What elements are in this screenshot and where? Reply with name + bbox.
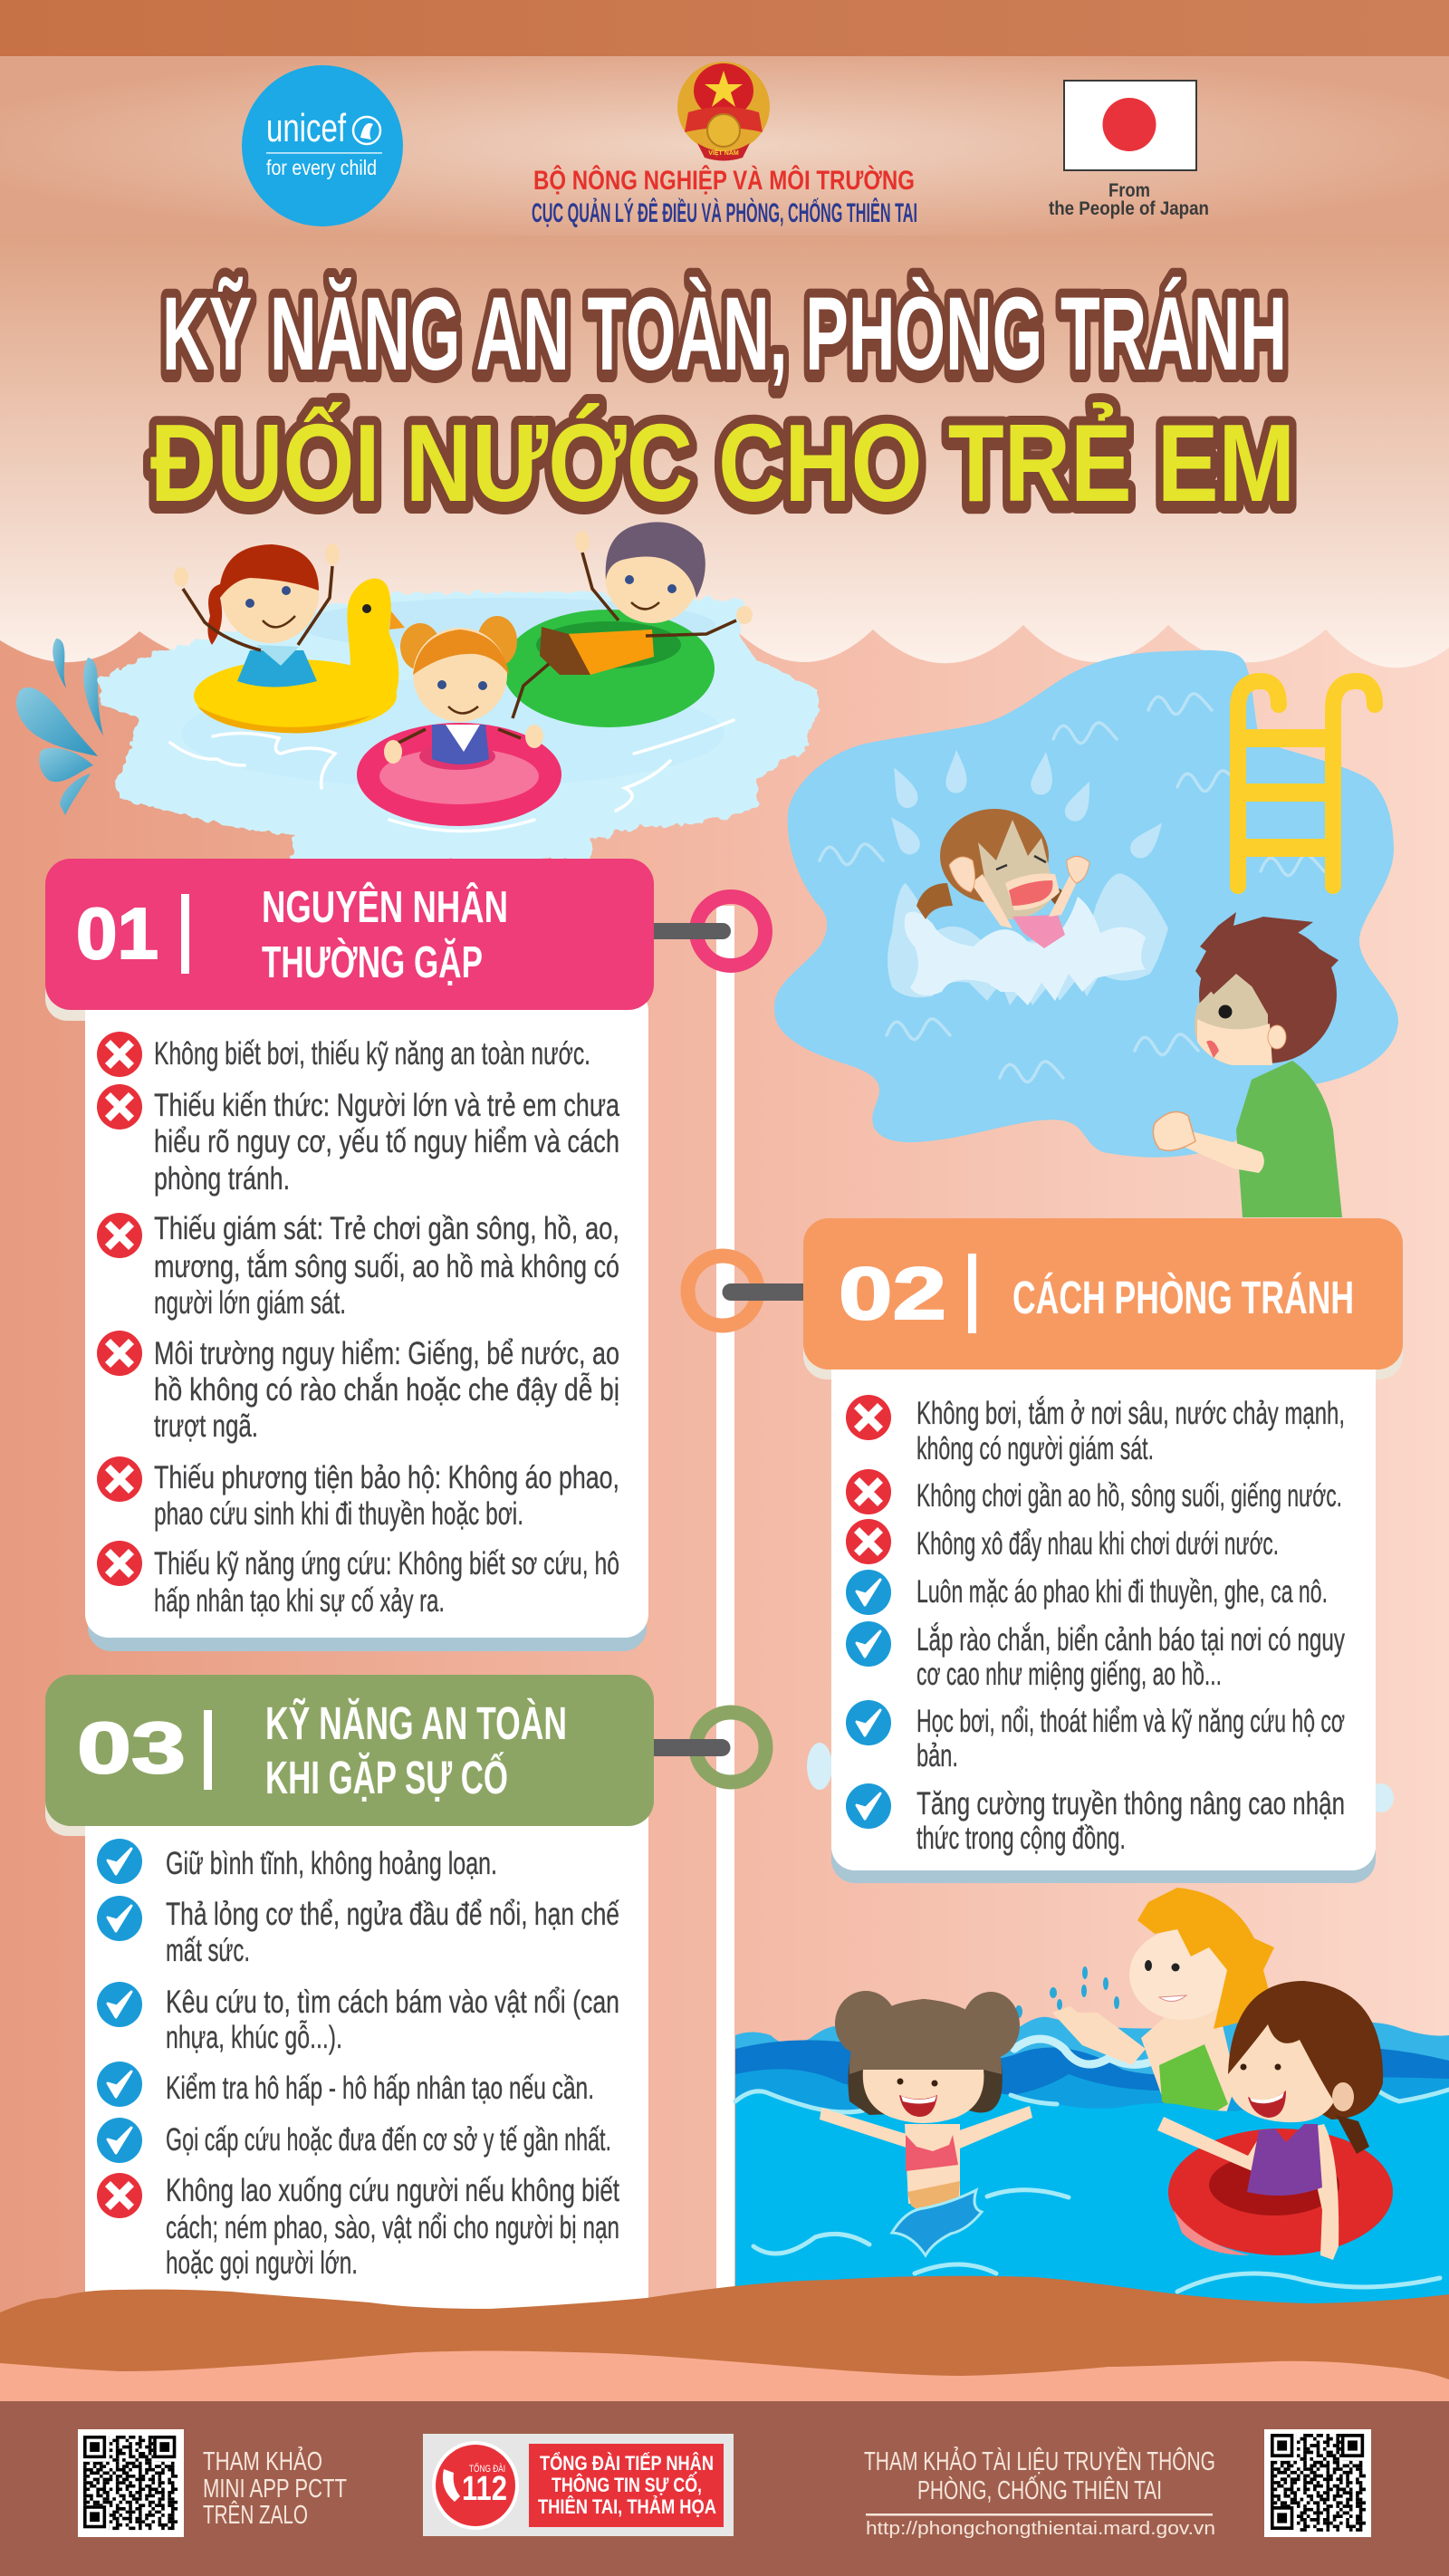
- list: causes: hiểu rõ nguy cơ, yếu tố nguy hiểm và cách: [154, 1124, 619, 1159]
- footer text: mini app: TRÊN ZALO: [203, 2500, 308, 2530]
- logo: Vietnam national emblem: [677, 62, 770, 161]
- QR code: mini app: [78, 2429, 184, 2537]
- footer text: mini app: MINI APP PCTT: [203, 2475, 347, 2504]
- footer text: documents: [864, 2446, 1215, 2539]
- illustration: pool with children on floats: [98, 522, 818, 860]
- list: causes: hấp nhân tạo khi sự cố xảy ra.: [154, 1583, 445, 1619]
- panel: 01 causes: [45, 859, 765, 1651]
- float: green ring: [503, 610, 715, 727]
- logo: Vietnam national emblem: VIỆT NAM: [708, 149, 739, 157]
- float: pink ring: [357, 723, 561, 826]
- list: causes: phòng tránh.: [154, 1161, 290, 1197]
- top colour band: [0, 0, 1449, 56]
- footer text: documents: PHÒNG, CHỐNG THIÊN TAI: [917, 2475, 1162, 2505]
- water squiggles: [820, 694, 1324, 1082]
- illustration: left water splash: [16, 639, 103, 815]
- water blob: [774, 650, 1398, 1158]
- list: safety skills: mất sức.: [166, 1933, 250, 1968]
- pool ladder: [1238, 681, 1375, 886]
- header: 02: 02: [839, 1253, 946, 1335]
- child: girl with red hair: [174, 543, 340, 687]
- footer: [0, 2401, 1449, 2576]
- list: prevention: cơ cao như miệng giếng, ao hồ...: [916, 1657, 1222, 1692]
- footer text: documents: THAM KHẢO TÀI LIỆU TRUYỀN THÔNG: [864, 2446, 1215, 2476]
- header: 02: [803, 1218, 1403, 1370]
- list: causes: Thiếu giám sát: Trẻ chơi gần sông, hồ, ao,: [154, 1211, 619, 1246]
- ministry name: CỤC QUẢN LÝ ĐÊ ĐIỀU VÀ PHÒNG, CHỐNG THIÊN TAI: [532, 197, 917, 228]
- list: safety skills: [97, 1839, 619, 2281]
- list: prevention: thức trong cộng đồng.: [916, 1821, 1126, 1856]
- splash: [888, 873, 1168, 1005]
- water splash at waist: [892, 2190, 982, 2255]
- list: causes: Môi trường nguy hiểm: Giếng, bể nước, ao: [154, 1336, 619, 1371]
- ministry name: BỘ NÔNG NGHIỆP VÀ MÔI TRƯỜNG: [533, 165, 915, 196]
- QR code: documents: [1264, 2429, 1371, 2537]
- girl on red ring: [1157, 1981, 1393, 2260]
- list: prevention: bản.: [916, 1738, 958, 1773]
- ministry name: [532, 165, 917, 228]
- connector ring 02: [688, 1255, 803, 1326]
- list: causes: Thiếu phương tiện bảo hộ: Không áo phao,: [154, 1460, 619, 1495]
- list: safety skills: Giữ bình tĩnh, không hoảng loạn.: [166, 1846, 497, 1881]
- list: safety skills: cách; ném phao, sào, vật nổi cho người bị nạn: [166, 2210, 619, 2245]
- panel: 02 prevention: [688, 1218, 1403, 1883]
- logo: Japan flag: the People of Japan: [1049, 198, 1209, 219]
- header: 01: NGUYÊN NHÂN: [262, 882, 508, 932]
- list: causes: người lớn giám sát.: [154, 1285, 346, 1321]
- list: safety skills: Gọi cấp cứu hoặc đưa đến cơ sở y tế gần nhất.: [166, 2122, 611, 2158]
- child: girl with orange hair: [384, 616, 543, 764]
- list: safety skills: nhựa, khúc gỗ...).: [166, 2020, 342, 2055]
- list: safety skills: Không lao xuống cứu người nếu không biết: [166, 2173, 619, 2208]
- connector ring 01: [654, 897, 765, 966]
- list: causes: Không biết bơi, thiếu kỹ năng an toàn nước.: [154, 1036, 590, 1072]
- list: safety skills: hoặc gọi người lớn.: [166, 2245, 358, 2281]
- logo: Japan flag: [1049, 81, 1209, 219]
- timeline vertical line: [716, 906, 734, 2391]
- front water: [735, 2086, 1449, 2391]
- hotline 112 badge: TỔNG ĐÀI: [469, 2463, 505, 2475]
- float: yellow duck: [194, 579, 405, 734]
- header: 03: [45, 1675, 654, 1826]
- header: 03: 03: [77, 1707, 186, 1788]
- worried boy: [1153, 912, 1342, 1217]
- illustration: child drowning and boy calling for help: [774, 650, 1398, 1217]
- footer text: mini app: [203, 2446, 347, 2530]
- bottom wave: brown: [0, 2276, 1449, 2379]
- girl with hair buns: [820, 1991, 1032, 2255]
- list: causes: Thiếu kỹ năng ứng cứu: Không biết sơ cứu, hô: [154, 1546, 619, 1581]
- header: 01: 01: [76, 893, 158, 974]
- hotline 112 badge: TỔNG ĐÀI TIẾP NHẬN: [540, 2452, 714, 2475]
- header: 01: THƯỜNG GẶP: [262, 937, 483, 987]
- list: safety skills: Kiểm tra hô hấp - hô hấp nhân tạo nếu cần.: [166, 2071, 594, 2106]
- pool water: [98, 591, 818, 860]
- panel: 03 safety skills: [45, 1675, 766, 2382]
- illustration: children playing in the waves: [735, 1888, 1449, 2391]
- boy with orange hair: [1015, 1888, 1274, 2124]
- list: prevention: không có người giám sát.: [916, 1431, 1154, 1466]
- logo: unicef: unicef: [266, 106, 347, 150]
- cloud puffs behind panel 2: [807, 1743, 1394, 1812]
- logo: unicef: for every child: [266, 156, 377, 179]
- hotline 112 badge: THÔNG TIN SỰ CỐ,: [552, 2473, 702, 2496]
- header: 01: [45, 859, 654, 1010]
- hotline 112 badge: 112: [462, 2470, 507, 2508]
- hotline 112 badge: THIÊN TAI, THẢM HỌA: [538, 2495, 716, 2518]
- sky area with scalloped wave edge: [0, 235, 1449, 668]
- footer text: mini app: THAM KHẢO: [203, 2446, 322, 2476]
- title: [150, 276, 1295, 524]
- child: boy with dark hair: [513, 522, 753, 718]
- logo: unicef: [242, 65, 403, 226]
- list: safety skills: Thả lỏng cơ thể, ngửa đầu để nổi, hạn chế: [166, 1897, 619, 1932]
- bottom wave: salmon strip: [0, 2319, 1449, 2405]
- list: causes: mương, tắm sông suối, ao hồ mà không có: [154, 1249, 619, 1284]
- water droplets: [882, 750, 1170, 862]
- water ripples: [170, 720, 734, 831]
- header: 03: KHI GẶP SỰ CỐ: [265, 1751, 508, 1803]
- list: causes: trượt ngã.: [154, 1408, 258, 1444]
- back waves: [735, 2017, 1449, 2355]
- hotline 112 badge: [423, 2434, 734, 2536]
- list: causes: Thiếu kiến thức: Người lớn và trẻ em chưa: [154, 1088, 619, 1123]
- header: 03: KỸ NĂNG AN TOÀN: [265, 1697, 567, 1749]
- list: causes: phao cứu sinh khi đi thuyền hoặc bơi.: [154, 1496, 523, 1532]
- connector ring 03: [654, 1712, 766, 1783]
- list: causes: hồ không có rào chắn hoặc che đậy dễ bị: [154, 1372, 619, 1408]
- footer text: documents: http://phongchongthientai.mard.gov.vn: [866, 2519, 1215, 2539]
- logo band: [0, 56, 1449, 235]
- list: causes: [97, 1032, 619, 1619]
- drowning girl: [916, 809, 1089, 948]
- splashing drops: [1015, 1966, 1119, 2018]
- list: safety skills: Kêu cứu to, tìm cách bám vào vật nổi (can: [166, 1985, 619, 2020]
- logo: Japan flag: From: [1108, 180, 1150, 201]
- list: prevention: [846, 1395, 1345, 1856]
